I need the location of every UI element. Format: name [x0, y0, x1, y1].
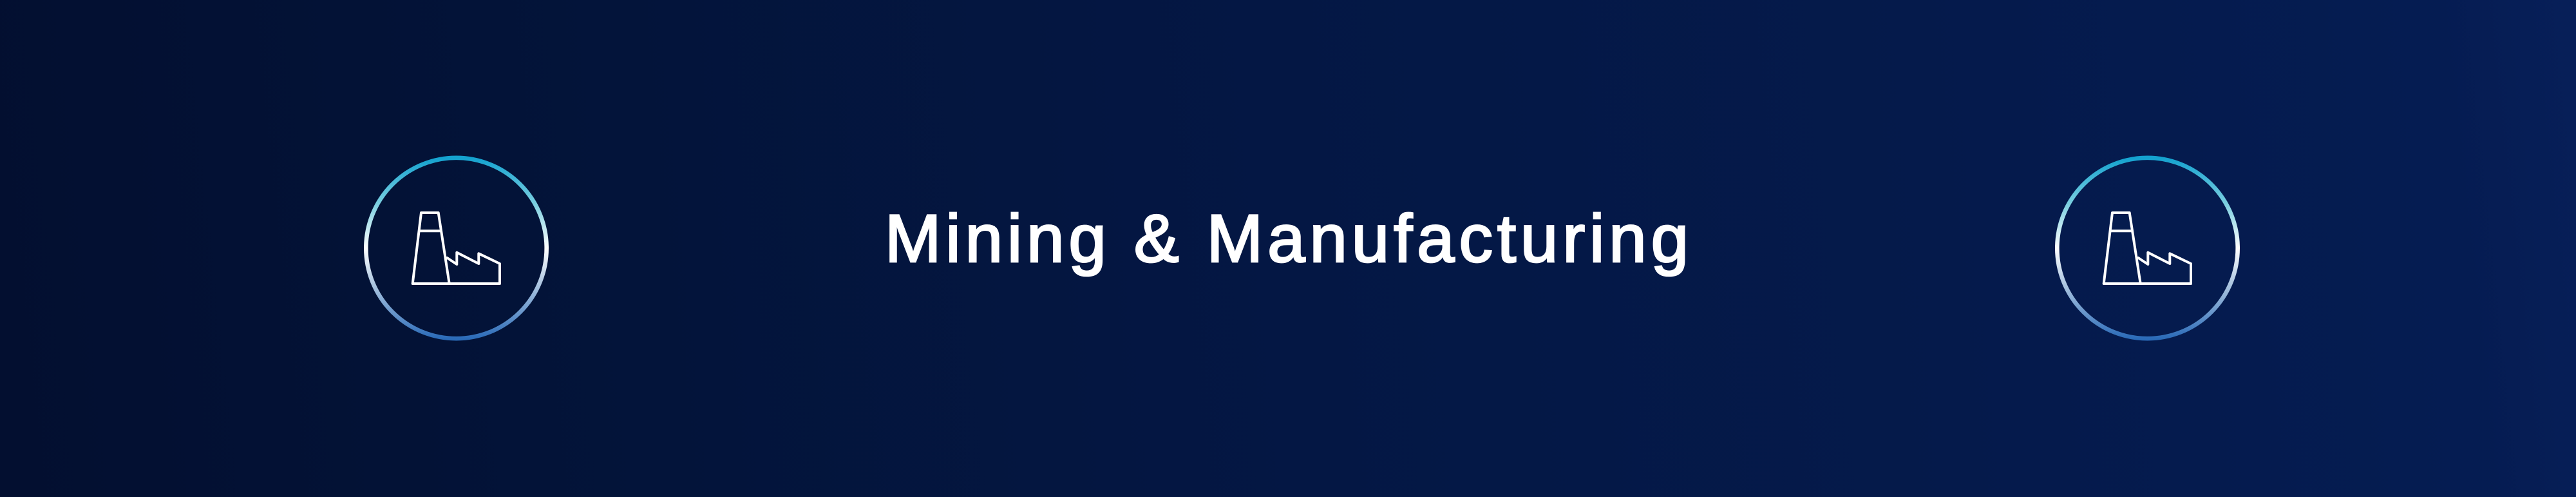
icon: left factory badge [366, 158, 547, 338]
title: Mining & Manufacturing [885, 201, 1689, 277]
left badge ring [366, 158, 547, 338]
right badge ring [2057, 158, 2238, 338]
icon: right factory [2104, 213, 2191, 284]
icon: right factory badge [2057, 158, 2238, 338]
icon: left factory [413, 213, 500, 284]
